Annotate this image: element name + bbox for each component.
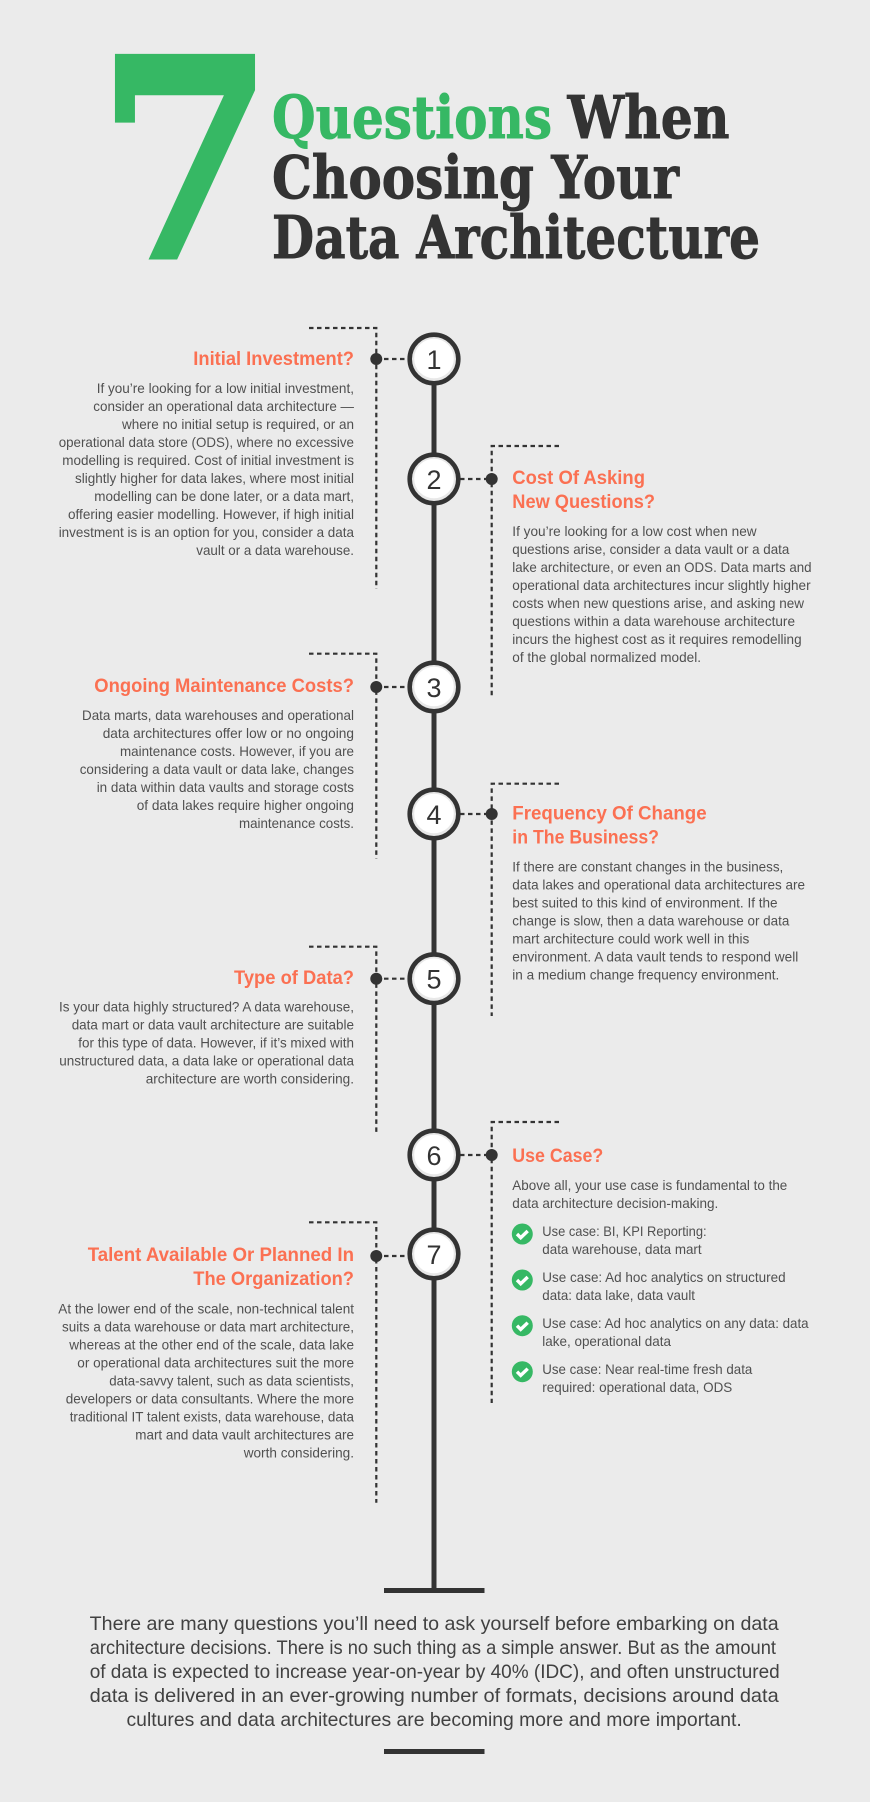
panel: cost of asking new questions: [410, 446, 812, 696]
heading: The Organization?: [193, 1269, 354, 1290]
icon: check 3: [512, 1315, 533, 1336]
body text: mart architecture could work well in this: [512, 931, 749, 947]
step number 1: [410, 335, 458, 383]
icon: check 1: [512, 1224, 533, 1244]
heading: [512, 468, 655, 513]
title: Questions: [272, 83, 552, 152]
body text: where no initial setup is required, or an: [121, 416, 354, 432]
big number 7: 7: [96, 0, 275, 324]
closing paragraph: [90, 1613, 780, 1731]
body text: Above all, your use case is fundamental to the: [512, 1177, 787, 1193]
body text: At the lower end of the scale, non-technical talent: [58, 1300, 354, 1316]
heading: Initial Investment?: [193, 349, 354, 370]
list item 3: lake, operational data: [542, 1333, 671, 1349]
heading: New Questions?: [512, 492, 655, 513]
body text: modelling can be done later, or a data mart,: [94, 488, 354, 504]
list item 4: [542, 1361, 752, 1395]
closing bar: [384, 1749, 484, 1754]
body text: [58, 1300, 354, 1460]
title: Choosing Your: [272, 143, 680, 212]
list item 4: Use case: Near real-time fresh data: [542, 1361, 752, 1377]
body text: data architecture decision-making.: [512, 1195, 718, 1211]
body text: costs when new questions arise, and asking new: [512, 595, 805, 611]
body text: consider an operational data architecture —: [93, 398, 354, 414]
body text: investment is is an option for you, consider a data: [59, 524, 354, 540]
body text: lake architecture, or even an ODS. Data marts and: [512, 559, 812, 575]
title: Data Architecture: [272, 203, 760, 272]
body text: [59, 999, 354, 1087]
panel: ongoing maintenance costs: [80, 654, 458, 859]
body text: maintenance costs. However, if you are: [120, 743, 354, 759]
body text: [80, 707, 354, 831]
body text: suits a data warehouse or data mart architecture,: [62, 1318, 354, 1334]
body text: operational data store (ODS), where no excessive: [59, 434, 354, 450]
body text: slightly higher for data lakes, where most initial: [75, 470, 354, 486]
step number 6: 6: [426, 1141, 442, 1171]
step number 7: [410, 1230, 458, 1278]
heading: Talent Available Or Planned In: [88, 1245, 354, 1266]
step number 4: 4: [426, 800, 442, 830]
body text: mart and data vault architectures are: [135, 1426, 354, 1442]
heading: Ongoing Maintenance Costs?: [94, 676, 354, 697]
body text: worth considering.: [243, 1444, 354, 1460]
closing paragraph: of data is expected to increase year-on-year by 40% (IDC), and often unstructured: [90, 1661, 780, 1683]
list item 2: [542, 1269, 786, 1303]
panel: frequency of change: [410, 784, 805, 1016]
heading: Cost Of Asking: [512, 468, 645, 489]
body text: architecture are worth considering.: [146, 1071, 354, 1087]
body text: If you’re looking for a low cost when new: [512, 523, 757, 539]
body text: questions arise, consider a data vault or a data: [512, 541, 789, 557]
body text: data architectures offer low or no ongoing: [103, 725, 354, 741]
heading: Frequency Of Change: [512, 803, 707, 824]
step number 4: [410, 790, 458, 838]
body text: data-savvy talent, such as data scientists,: [109, 1372, 354, 1388]
body text: developers or data consultants. Where the more: [66, 1390, 354, 1406]
timeline stem: [384, 359, 484, 1593]
heading: Type of Data?: [234, 968, 354, 989]
list item 1: Use case: BI, KPI Reporting:: [542, 1223, 707, 1239]
step number 3: 3: [426, 673, 442, 703]
panel: talent available: [58, 1222, 458, 1503]
body text: for this type of data. However, if it’s mixed with: [78, 1035, 354, 1051]
list item 2: Use case: Ad hoc analytics on structured: [542, 1269, 786, 1285]
body text: operational data architectures incur slightly higher: [512, 577, 811, 593]
step number 1: 1: [426, 345, 442, 375]
body text: of data lakes require higher ongoing: [137, 797, 354, 813]
body text: [512, 1177, 787, 1211]
step number 7: 7: [426, 1240, 442, 1270]
step number 2: [410, 455, 458, 503]
panel: use case: [410, 1122, 809, 1403]
list item 1: [542, 1223, 707, 1257]
heading: in The Business?: [512, 827, 659, 848]
list item 4: required: operational data, ODS: [542, 1379, 732, 1395]
body text: modelling is required. Cost of initial investment is: [62, 452, 354, 468]
body text: [59, 380, 354, 558]
body text: questions within a data warehouse architecture: [512, 613, 795, 629]
body text: data mart or data vault architecture are suitable: [72, 1017, 354, 1033]
body text: of the global normalized model.: [512, 649, 701, 665]
title: When: [567, 83, 730, 152]
panel: type of data: [59, 947, 458, 1134]
list item 3: [542, 1315, 809, 1349]
heading: [88, 1245, 354, 1290]
body text: or operational data architectures suit the more: [77, 1354, 354, 1370]
body text: Data marts, data warehouses and operational: [82, 707, 354, 723]
step number 5: 5: [426, 965, 442, 995]
list item 3: Use case: Ad hoc analytics on any data: data: [542, 1315, 809, 1331]
body text: offering easier modelling. However, if high initial: [68, 506, 354, 522]
body text: Is your data highly structured? A data warehouse,: [59, 999, 354, 1015]
title: [272, 83, 760, 272]
body text: change is slow, then a data warehouse or data: [512, 913, 790, 929]
body text: vault or a data warehouse.: [196, 542, 354, 558]
heading: Use Case?: [512, 1146, 603, 1167]
body text: traditional IT talent exists, data warehouse, data: [70, 1408, 354, 1424]
list item 2: data: data lake, data vault: [542, 1287, 695, 1303]
body text: in data within data vaults and storage costs: [97, 779, 354, 795]
body text: If you’re looking for a low initial investment,: [97, 380, 354, 396]
step number 6: [410, 1131, 458, 1179]
heading: [512, 803, 707, 848]
icon: check 4: [512, 1361, 533, 1382]
body text: [512, 859, 805, 983]
body text: incurs the highest cost as it requires remodelling: [512, 631, 802, 647]
icon: check 2: [512, 1270, 533, 1290]
body text: considering a data vault or data lake, changes: [80, 761, 354, 777]
body text: data lakes and operational data architectures are: [512, 877, 805, 893]
closing paragraph: architecture decisions. There is no such thing as a simple answer. But as the amount: [90, 1637, 777, 1659]
step number 3: [410, 663, 458, 711]
body text: environment. A data vault tends to respond well: [512, 949, 798, 965]
panel: initial investment: [59, 328, 458, 589]
body text: If there are constant changes in the business,: [512, 859, 783, 875]
closing paragraph: cultures and data architectures are becoming more and more important.: [126, 1709, 742, 1731]
step number 5: [410, 954, 458, 1003]
closing paragraph: There are many questions you’ll need to ask yourself before embarking on data: [90, 1613, 779, 1635]
list item 1: data warehouse, data mart: [542, 1241, 702, 1257]
body text: maintenance costs.: [239, 815, 354, 831]
body text: in a medium change frequency environment.: [512, 967, 779, 983]
body text: best suited to this kind of environment. If the: [512, 895, 778, 911]
step number 2: 2: [426, 465, 442, 495]
body text: whereas at the other end of the scale, data lake: [68, 1336, 354, 1352]
body text: unstructured data, a data lake or operational data: [59, 1053, 354, 1069]
closing paragraph: data is delivered in an ever-growing number of formats, decisions around data: [90, 1685, 779, 1707]
body text: [512, 523, 812, 665]
